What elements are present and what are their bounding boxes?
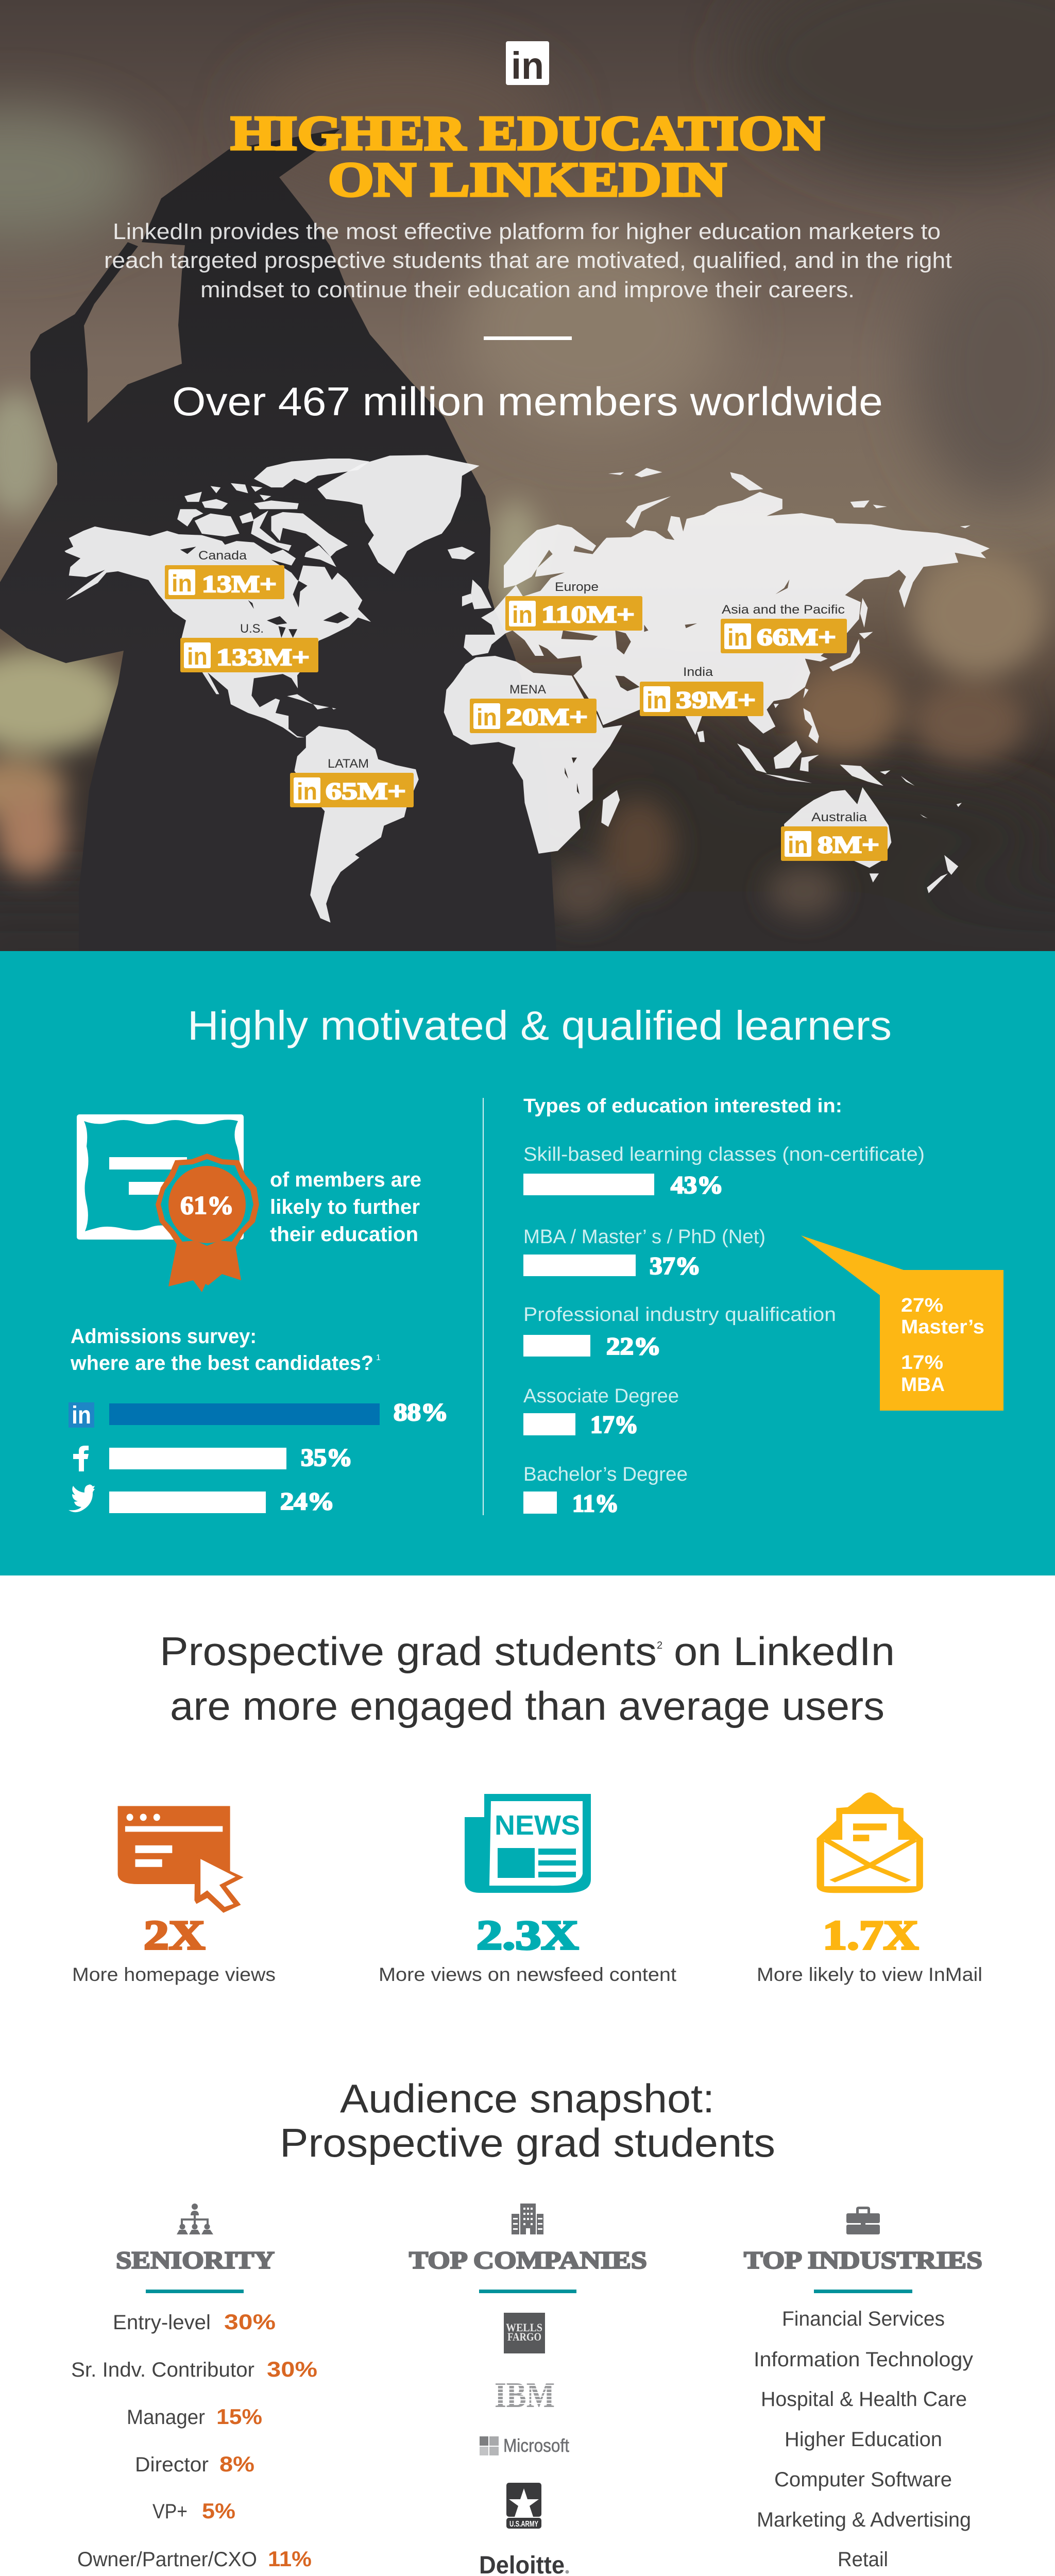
column: top industries: Computer Software	[774, 2468, 952, 2491]
intro paragraph	[104, 219, 952, 302]
bar chart: types of education: Bachelor’s Degree	[523, 1464, 688, 1485]
map callout: Europe: 110M+	[541, 601, 635, 628]
heading	[160, 1629, 895, 1728]
panel: prospective grad students engagement	[0, 1575, 1055, 2576]
column: top industries	[744, 2207, 982, 2571]
column: seniority: 30%	[267, 2357, 317, 2381]
stat: 2.3X newsfeed	[379, 1913, 677, 1985]
column: seniority: 15%	[216, 2404, 262, 2429]
heading	[280, 2076, 775, 2165]
callout: master's and MBA split: 17%	[901, 1352, 943, 1374]
map callout: MENA: 20M+	[506, 704, 588, 731]
column: seniority: 30%	[224, 2310, 276, 2334]
map callout: Australia: in	[788, 832, 808, 858]
logo: Wells Fargo: WELLS	[506, 2321, 542, 2334]
world map	[64, 455, 990, 923]
logo: Microsoft: Microsoft	[503, 2435, 569, 2456]
bar chart: types of education: 17%	[590, 1411, 638, 1438]
map callout: Canada: in	[172, 570, 192, 597]
stat: 1.7X InMail	[757, 1913, 982, 1985]
icon: buildings	[512, 2204, 543, 2234]
column: seniority: Entry-level	[113, 2311, 211, 2334]
icon: certificate with 61% badge: 61%	[180, 1191, 234, 1219]
bar chart: admissions survey	[69, 1399, 448, 1515]
map callout: India: India	[683, 665, 713, 679]
map callout: LATAM	[290, 757, 414, 807]
column: top industries: Higher Education	[785, 2428, 942, 2451]
bar chart: types of education: Professional industry qualification	[523, 1304, 836, 1326]
intro paragraph: LinkedIn provides the most effective platform for higher education marketers to	[113, 219, 941, 244]
map heading: Over 467 million members worldwide	[172, 379, 883, 424]
title: HIGHER EDUCATION	[231, 107, 824, 160]
silhouette of graduate	[0, 129, 556, 951]
heading: on LinkedIn	[674, 1629, 895, 1674]
column: seniority: Director	[135, 2453, 209, 2476]
logo: Wells Fargo	[504, 2313, 545, 2353]
map callout: Europe: Europe	[555, 580, 599, 594]
map callout: U.S.: 133M+	[216, 644, 310, 671]
bar chart: admissions survey: 35%	[301, 1444, 352, 1471]
column: top industries: TOP INDUSTRIES	[744, 2247, 982, 2274]
heading: are more engaged than average users	[170, 1683, 884, 1728]
logo: Wells Fargo: FARGO	[507, 2330, 541, 2343]
column: top companies: TOP COMPANIES	[409, 2247, 647, 2274]
map callout: Australia: 8M+	[818, 832, 879, 858]
column: seniority: Manager	[127, 2406, 205, 2429]
map: Americas and Greenland	[64, 455, 480, 923]
column: top companies	[409, 2204, 647, 2576]
column: seniority	[71, 2204, 317, 2571]
text: likely to further education: likely to further	[270, 1196, 420, 1218]
column: seniority: Owner/Partner/CXO	[77, 2548, 257, 2571]
callout: master's and MBA split: MBA	[901, 1374, 945, 1396]
bar chart: types of education: MBA / Master’ s / PhD (Net)	[523, 1226, 765, 1248]
column: seniority: SENIORITY	[116, 2247, 275, 2274]
bar chart: types of education	[523, 1095, 925, 1517]
icon: mail	[816, 1792, 923, 1893]
title: ON LINKEDIN	[328, 153, 726, 207]
text: admissions survey heading: where are the best candidates?	[70, 1352, 373, 1375]
text: admissions survey heading: Admissions survey:	[71, 1325, 257, 1348]
map callout: MENA: MENA	[509, 683, 546, 697]
logo: U.S. Army	[506, 2483, 541, 2529]
column: seniority: 5%	[202, 2499, 235, 2523]
column: seniority: VP+	[152, 2500, 188, 2523]
callout: master's and MBA split: Master’s	[901, 1316, 984, 1338]
text: admissions survey heading: 1	[376, 1353, 381, 1362]
map callout: India: 39M+	[676, 687, 756, 714]
map: Europe, Asia, Africa, Oceania	[444, 468, 990, 893]
map callout: U.S.: in	[187, 643, 208, 670]
map callout: Asia and the Pacific: in	[727, 624, 748, 651]
map callout: Asia and the Pacific	[721, 603, 847, 653]
text: likely to further education	[270, 1168, 421, 1246]
stat: 2.3X newsfeed: 2.3X	[477, 1913, 578, 1958]
map callout: Asia and the Pacific: Asia and the Pacific	[722, 603, 845, 617]
column: seniority: 11%	[268, 2547, 312, 2571]
icon: browser with cursor	[118, 1806, 244, 1913]
panel: hero photo header	[0, 0, 1055, 1046]
stat: 2X homepage views	[72, 1913, 276, 1985]
bar chart: types of education: 22%	[606, 1333, 661, 1360]
intro paragraph: mindset to continue their education and improve their careers.	[200, 277, 855, 302]
bar chart: types of education: 37%	[650, 1252, 701, 1280]
icon: newspaper	[465, 1794, 591, 1893]
logo: U.S. Army: U.S.ARMY	[509, 2520, 538, 2529]
icon: newspaper: NEWS	[495, 1810, 580, 1841]
map callout: Australia	[781, 810, 888, 861]
bar chart: types of education: 43%	[671, 1172, 723, 1199]
map callout: LATAM: in	[297, 778, 317, 805]
logo: LinkedIn white: in	[511, 44, 544, 87]
panel: motivated and qualified learners	[0, 951, 1055, 1575]
map callout: Europe	[505, 580, 642, 631]
heading: 2	[657, 1640, 662, 1651]
column: top industries: Hospital & Health Care	[761, 2388, 967, 2411]
stat: 2.3X newsfeed: More views on newsfeed content	[379, 1964, 677, 1985]
column: top industries: Retail	[838, 2548, 888, 2571]
icon: certificate with 61% badge	[77, 1114, 259, 1292]
icon: briefcase	[846, 2207, 880, 2234]
map callout: LATAM: 65M+	[326, 778, 406, 805]
bar chart: types of education: 11%	[572, 1490, 619, 1517]
stat: 1.7X InMail: More likely to view InMail	[757, 1964, 982, 1985]
heading: Prospective grad students	[160, 1629, 657, 1674]
heading: Prospective grad students	[280, 2120, 775, 2165]
map callout: U.S.	[180, 622, 318, 672]
column: top industries: Information Technology	[754, 2348, 973, 2371]
icon: org chart	[177, 2204, 213, 2234]
column: seniority: 8%	[219, 2452, 254, 2476]
bar chart: types of education: Skill-based learning classes (non-certificate)	[523, 1144, 925, 1165]
map callout: Canada: 13M+	[202, 571, 277, 598]
text: likely to further education: their education	[270, 1223, 418, 1246]
logo: IBM: IBM	[495, 2376, 555, 2415]
column: top industries: Marketing & Advertising	[757, 2509, 971, 2531]
photo background	[0, 0, 1055, 1046]
column: top industries: Financial Services	[782, 2308, 945, 2330]
map callout: Australia: Australia	[811, 810, 867, 824]
stat: 2X homepage views: More homepage views	[72, 1964, 276, 1985]
map callout: MENA	[470, 683, 597, 733]
map callout: India: in	[646, 687, 667, 714]
callout: master's and MBA split	[801, 1235, 1003, 1411]
bar chart: admissions survey: in	[72, 1402, 91, 1429]
map callout: India	[640, 665, 763, 716]
logo: Microsoft	[480, 2435, 569, 2456]
map callout: U.S.: U.S.	[240, 622, 264, 636]
map callout: MENA: in	[477, 704, 497, 731]
panel: audience snapshot	[71, 2076, 982, 2576]
text: admissions survey heading	[70, 1325, 381, 1375]
bar chart: types of education: Types of education interested in:	[523, 1095, 842, 1117]
column: seniority: Sr. Indv. Contributor	[71, 2359, 254, 2381]
map callout: Asia and the Pacific: 66M+	[757, 624, 836, 651]
map callout: LATAM: LATAM	[328, 757, 369, 771]
bar chart: admissions survey: 88%	[394, 1399, 448, 1426]
map callout: Canada	[165, 549, 284, 599]
stat: 1.7X InMail: 1.7X	[823, 1913, 918, 1958]
bar chart: admissions survey: 24%	[280, 1488, 334, 1515]
heading: Audience snapshot:	[340, 2076, 714, 2121]
title	[231, 107, 824, 207]
map callout: Europe: in	[512, 601, 533, 628]
heading: Highly motivated & qualified learners	[188, 1003, 892, 1048]
stat: 2X homepage views: 2X	[144, 1913, 205, 1958]
intro paragraph: reach targeted prospective students that are motivated, qualified, and in the right	[104, 248, 952, 273]
map callout: Canada: Canada	[198, 549, 247, 563]
text: likely to further education: of members are	[270, 1168, 421, 1191]
callout: master's and MBA split: 27%	[901, 1295, 943, 1316]
bar chart: types of education: Associate Degree	[523, 1385, 679, 1407]
